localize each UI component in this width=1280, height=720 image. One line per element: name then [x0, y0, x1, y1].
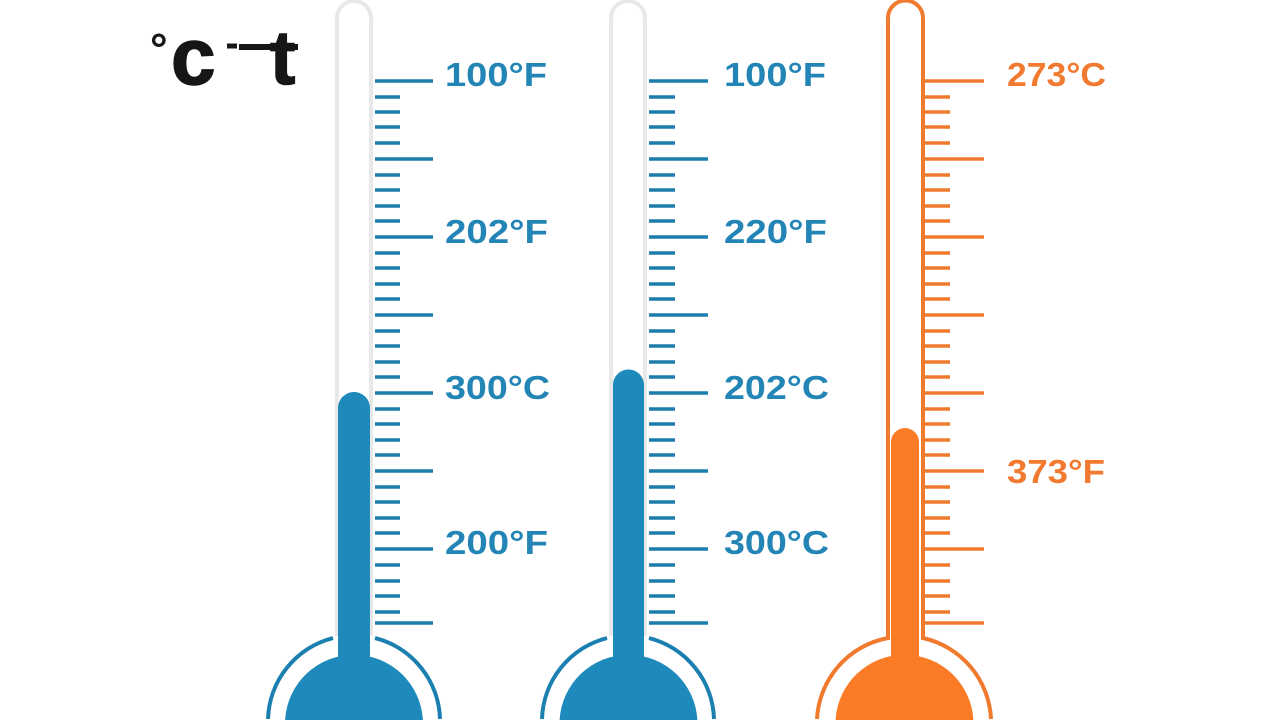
scale ticks: [649, 81, 708, 623]
mercury column: [338, 392, 370, 680]
thermometer 1 (blue): 200°F: [445, 524, 548, 561]
bulb: [836, 655, 973, 720]
thermometer 1 (blue): 300°C: [445, 369, 550, 406]
labels: 100°F: [445, 56, 547, 93]
labels: 273°C: [1007, 56, 1106, 93]
bulb: [560, 655, 697, 720]
logo: degree C to t: °: [150, 25, 168, 74]
glass tube: [337, 1, 371, 636]
labels: 100°F: [724, 56, 826, 93]
glass tube and ring: [817, 1, 991, 719]
scale ticks: [925, 81, 984, 623]
thermometer 2 (blue): [542, 1, 829, 720]
thermometer 2 (blue): 300°C: [724, 524, 829, 561]
glass tube: [611, 1, 645, 636]
thermometer 1 (blue): 202°F: [445, 213, 548, 250]
thermometer 3 (orange): 373°F: [1007, 453, 1105, 490]
logo: degree C to t: c: [171, 12, 216, 101]
bulb ring: [542, 638, 714, 719]
thermometer 3 (orange): [817, 1, 1106, 720]
logo: degree C to t: t: [270, 16, 295, 101]
bulb: [285, 655, 423, 720]
mercury column: [891, 428, 919, 680]
thermometer 1 (blue): [268, 1, 550, 720]
thermometer 2 (blue): 202°C: [724, 369, 829, 406]
mercury column: [613, 370, 644, 680]
scale ticks: [375, 81, 433, 623]
thermometer 2 (blue): 220°F: [724, 213, 827, 250]
bulb ring: [268, 638, 440, 719]
logo: degree C to t: [150, 12, 298, 101]
